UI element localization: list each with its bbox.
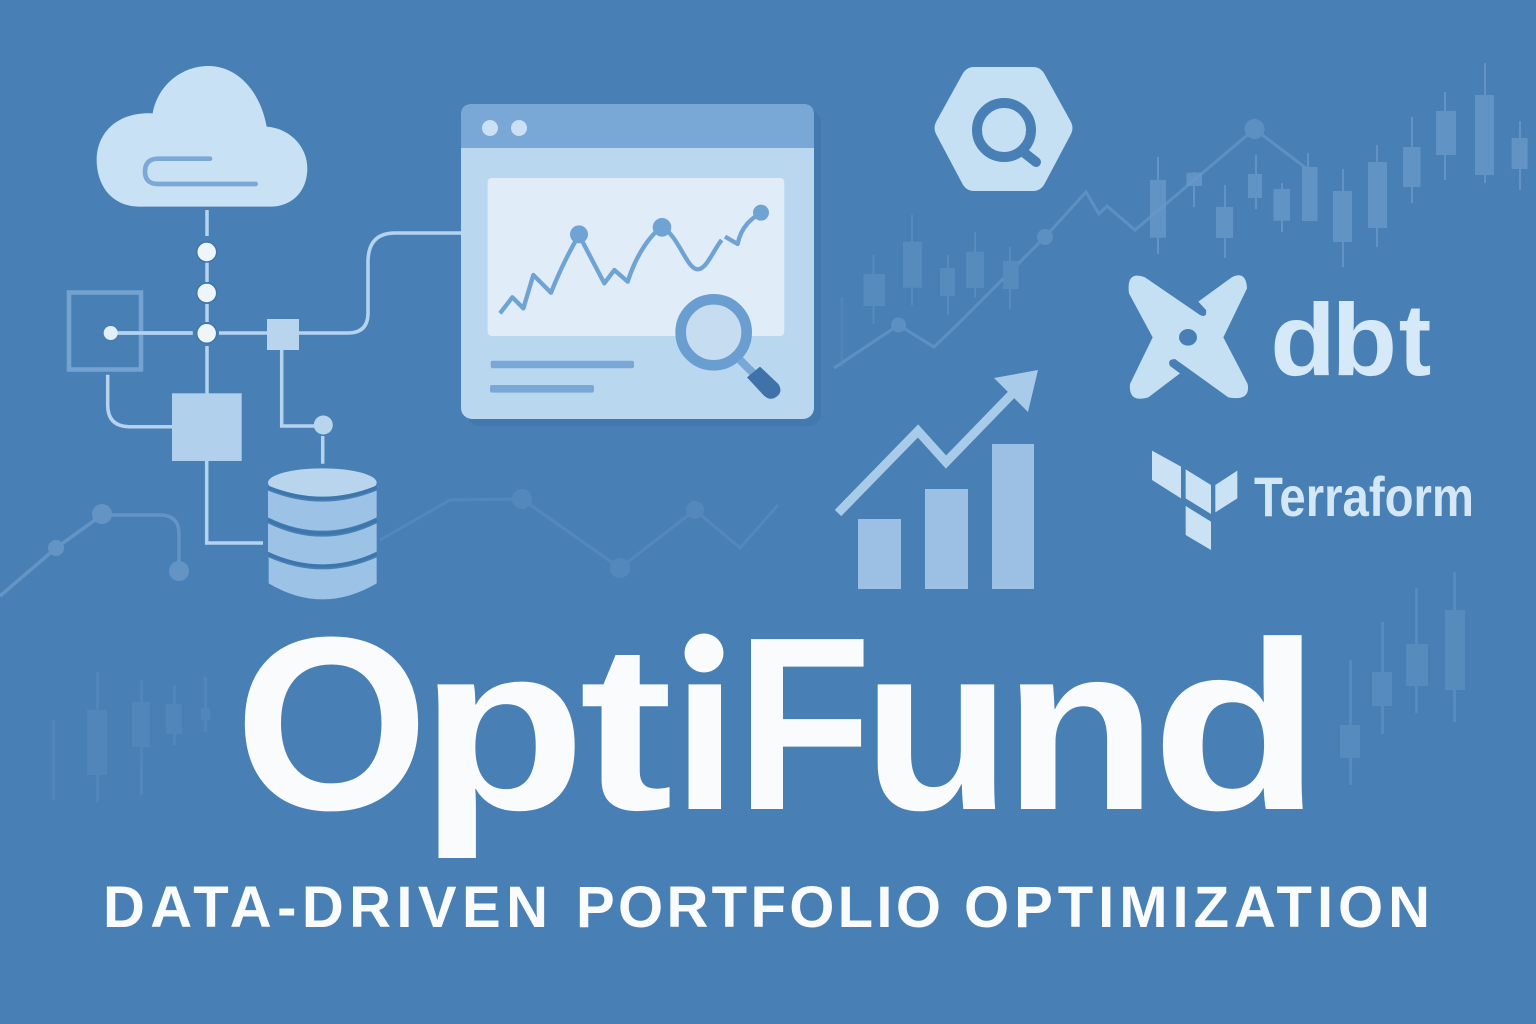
background candlesticks: lower left [52,672,210,802]
subtitle: OPTIMIZATION [964,875,1430,940]
icon: Terraform logo [1152,451,1237,550]
dbt wordmark: d [1270,283,1336,397]
small round node [314,416,333,434]
title: u [863,596,1011,860]
title [235,586,1321,862]
title: O [235,586,429,862]
title: i [672,596,738,860]
large square node [172,393,242,461]
title: d [1152,592,1321,860]
data pipeline diagram [69,66,461,599]
icon: dbt logo [1129,275,1248,399]
dbt wordmark: t [1399,283,1431,397]
title: n [1003,596,1157,860]
background line chart: lower left [0,504,189,596]
icon: hexagon search logo [934,67,1072,191]
growth bar chart with arrow [838,370,1038,589]
dashboard window [461,104,821,426]
outlined square node [69,292,193,370]
line chart [500,205,769,313]
background line chart: centre [380,489,778,578]
pipeline nodes [197,242,217,343]
background candlesticks: lower right [1340,572,1465,785]
title: F [736,586,872,862]
title: p [420,596,586,860]
window title bar [461,104,814,148]
text lines [491,361,634,368]
small square node [267,319,299,350]
cloud icon [97,66,307,207]
background stock chart: upper right [834,63,1528,368]
dbt wordmark: b [1332,283,1397,397]
subtitle: DATA-DRIVEN [103,875,548,940]
database icon [268,468,377,599]
title: t [579,596,673,860]
Terraform wordmark: Terraform [1254,465,1474,528]
subtitle: PORTFOLIO [576,875,941,940]
magnifier icon [681,299,780,399]
pipeline connector lines [108,210,461,543]
chart panel [488,178,784,336]
